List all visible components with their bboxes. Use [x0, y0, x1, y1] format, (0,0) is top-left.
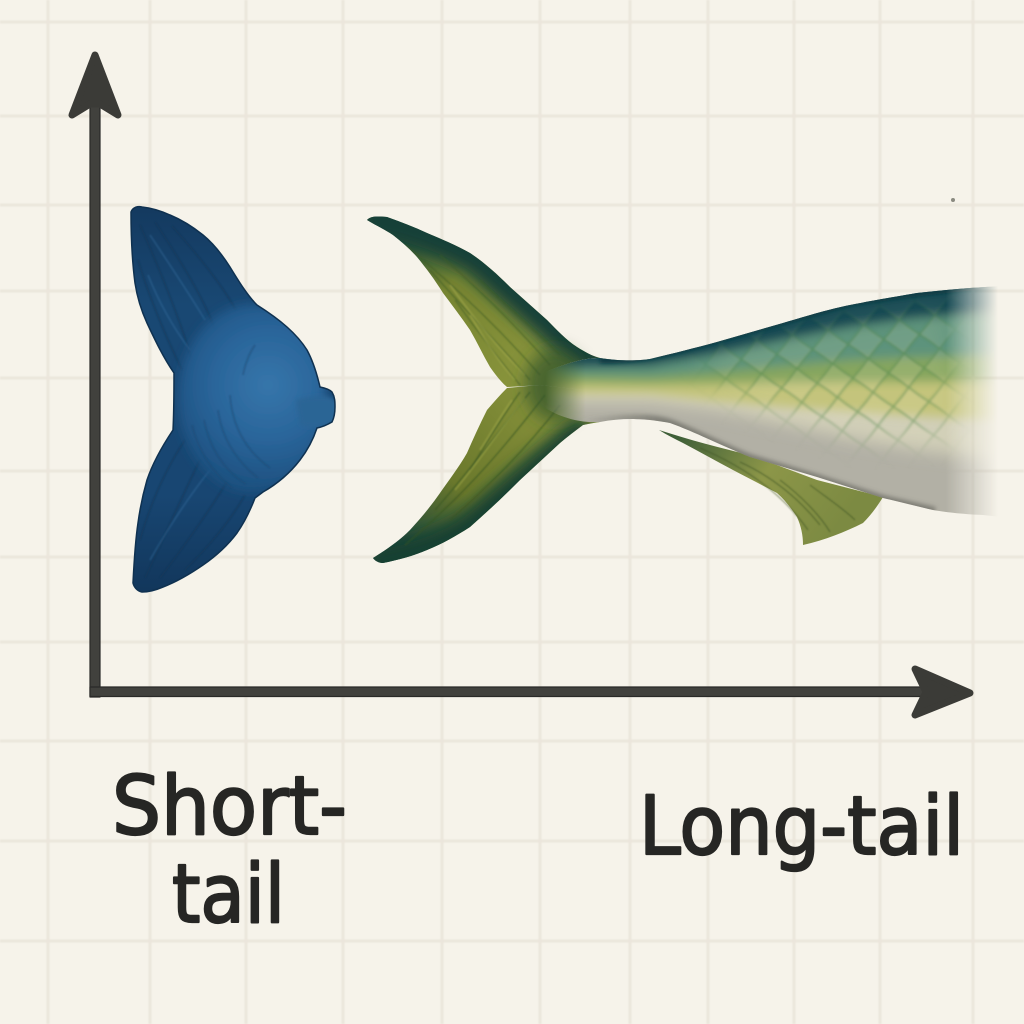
tail junction shading — [525, 349, 585, 421]
label: short-tail: tail — [172, 848, 285, 942]
label: short-tail: Short- — [112, 760, 347, 854]
small speck — [951, 198, 955, 202]
lower tail lobe — [373, 385, 600, 563]
x axis arrow — [90, 669, 970, 715]
fish body — [548, 286, 996, 516]
long tail: green fish — [360, 210, 1024, 570]
label: long-tail: Long-tail — [639, 780, 964, 874]
upper tail lobe — [367, 216, 600, 390]
y axis arrow — [72, 55, 118, 697]
label: short-tail — [112, 760, 347, 942]
short tail: blue fish tail — [130, 206, 336, 593]
fish lower fin — [659, 430, 883, 545]
